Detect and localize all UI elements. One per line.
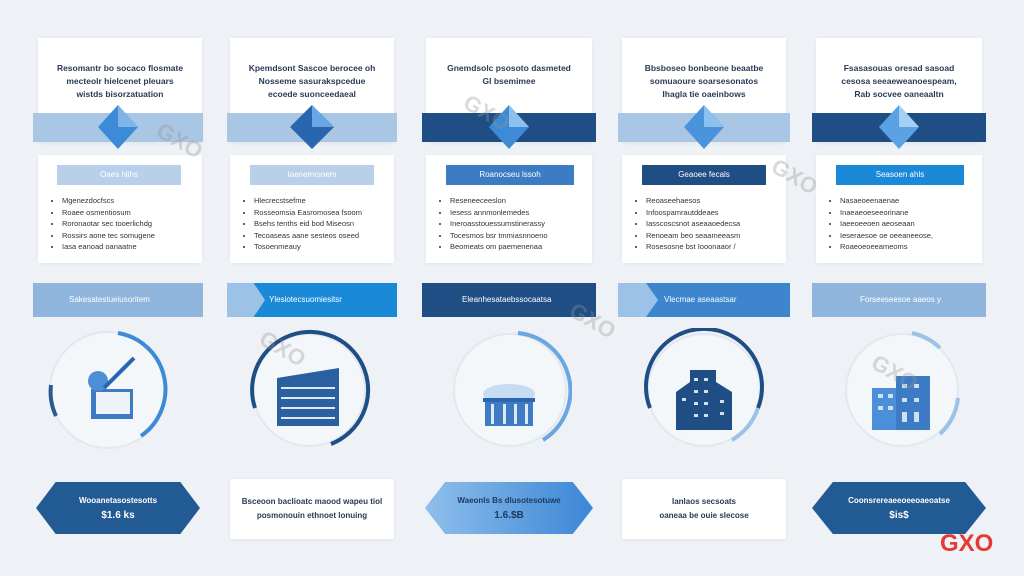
ring 3 <box>453 331 572 447</box>
band 5 <box>812 113 986 142</box>
card top 4: Ihagla tie oaeinbows <box>662 89 746 99</box>
watermark: GXO <box>459 90 514 136</box>
card top 5 <box>816 38 982 142</box>
watermark: GXO <box>767 154 822 200</box>
card lower 1: Rossirs aone tec somugene <box>62 230 155 240</box>
card lower 5: Nasaeoeenaenae <box>840 196 899 205</box>
column 2 <box>227 38 397 540</box>
card top 2: Kpemdsont Sascoe berocee oh <box>249 63 375 73</box>
card top 1: wistds bisorzatuation <box>77 89 163 99</box>
card top 2 <box>230 38 394 142</box>
card lower 3: Roanocseu lssoh <box>479 170 541 179</box>
ring 2 <box>250 330 370 447</box>
ring 1 <box>48 331 168 449</box>
card top 2: Nosseme sasurakspcedue <box>259 76 365 86</box>
bottom 2: posmonouin ethnoet lonuing <box>257 511 367 520</box>
logo GXO: GXO <box>940 530 993 557</box>
bottom 4: oaneaa be ouie slecose <box>659 511 749 520</box>
icon diamond 5 <box>879 105 919 149</box>
card lower 1: Roronaotar sec tooerlichdg <box>62 219 152 228</box>
banner 2 <box>227 283 397 317</box>
bottom 1: $1.6 ks <box>101 510 135 521</box>
banner 1 <box>33 283 203 317</box>
bottom 5: $is$ <box>889 510 909 521</box>
bottom 4: Ianlaos secsoats <box>672 497 736 506</box>
card lower 3: Reseneeceeslon <box>450 196 506 205</box>
bottom 5: Coonsrereaeeoeeoaeoatse <box>848 496 950 505</box>
bottom 3: Waeonls Bs dlusotesotuwe <box>457 496 561 505</box>
card lower 2 <box>230 155 394 263</box>
watermark: GXO <box>565 298 620 344</box>
card top 1 <box>38 38 202 142</box>
banner 4: Vlecmae aseaastsar <box>664 295 736 304</box>
bottom 1 <box>36 482 200 534</box>
banner 2: Ylesiotecsuomiesitsr <box>269 295 342 304</box>
bottom 5 <box>812 482 986 534</box>
card lower 2: Iaenemrsnem <box>288 170 336 179</box>
card top 2: ecoede suonceedaeal <box>268 89 356 99</box>
card top 5: Rab socvee oaneaaltn <box>854 89 944 99</box>
card lower 4: Renoeam beo seaameeasm <box>646 230 740 240</box>
column 3 <box>422 38 596 534</box>
card lower 1: Mgenezdocfscs <box>62 196 114 205</box>
ring 5 <box>845 331 960 447</box>
watermark: GXO <box>867 350 922 396</box>
card top 1: Resomantr bo socaco flosmate <box>57 63 183 73</box>
bottom 3: 1.6.$B <box>494 510 524 521</box>
card lower 2: Tecoaseas aane sesteos oseed <box>254 230 359 240</box>
icon diamond 4 <box>684 105 724 149</box>
card top 3: Gnemdsolc psosoto dasmeted <box>447 63 571 73</box>
band 4 <box>618 113 790 142</box>
card top 3: Gl bsemimee <box>483 76 535 86</box>
banner 5: Forseeseesoe aaeos y <box>860 295 941 304</box>
card lower 4: Infoospamrautddeaes <box>646 208 719 216</box>
card lower 1: Roaee osmentiosum <box>62 208 131 216</box>
card lower 3: Ineroasstouessumstinerassy <box>450 219 545 228</box>
banner 3 <box>422 283 596 317</box>
card top 5: Fsasasouas oresad sasoad <box>844 63 954 73</box>
card lower 2: Hlecrecstsefme <box>254 196 306 205</box>
bottom 4 <box>622 479 786 539</box>
card top 4: Bbsboseo bonbeone beaatbe <box>645 63 763 73</box>
column 4 <box>618 38 790 540</box>
card top 1: mecteolr hielcenet pleuars <box>66 76 174 86</box>
watermark: GXO <box>255 326 310 372</box>
band 1 <box>33 113 203 142</box>
card lower 1: Oaes hlihs <box>100 170 138 179</box>
card lower 3: Tocesmos bsr tmmiasnnoeno <box>450 230 548 240</box>
bottom 1: Wooanetasostesotts <box>79 496 157 505</box>
card lower 5: Seasoen ahls <box>876 170 924 179</box>
band 2 <box>227 113 397 142</box>
card lower 4: Iasscoscsnot aseaaoedecsa <box>646 219 740 228</box>
card lower 3: Iesess annmonlemedes <box>450 208 529 216</box>
column 1 <box>33 38 203 534</box>
card lower 3 <box>426 155 592 263</box>
card lower 4: Geaoee fecals <box>678 170 730 179</box>
bottom 3 <box>425 482 593 534</box>
card lower 5 <box>816 155 982 263</box>
card lower 4: Rosesosne bst Iooonaaor / <box>646 242 736 251</box>
watermark: GXO <box>152 118 207 164</box>
card lower 3: Beomeats om paemenenaa <box>450 242 542 251</box>
column 5 <box>812 38 986 534</box>
ring 4 <box>644 328 764 447</box>
icon diamond 1 <box>98 105 138 149</box>
banner 4 <box>618 283 790 317</box>
card lower 1: Iasa eanoad oanaatne <box>62 242 137 251</box>
card lower 4 <box>622 155 786 263</box>
card lower 5: Iaeeoeeoen aeoseaan <box>840 219 915 228</box>
card lower 5: Inaeaeoeseeorinane <box>840 208 908 216</box>
card top 4 <box>622 38 786 142</box>
icon diamond 3 <box>489 105 529 149</box>
card top 3 <box>426 38 592 142</box>
banner 5 <box>812 283 986 317</box>
card lower 5: Ieseraesoe oe oeeaneeose, <box>840 230 933 240</box>
card top 5: cesosa seeaeweanoespeam, <box>841 76 957 86</box>
card lower 2: Bsehs tenths eid bod Miseosn <box>254 219 354 228</box>
card lower 4: Reoaseehaesos <box>646 196 700 205</box>
card lower 1 <box>38 155 202 263</box>
bottom 2 <box>230 479 394 539</box>
banner 3: Eleanhesataebssocaatsa <box>462 295 551 304</box>
card lower 2: Rosseomsia Easromosea fsoom <box>254 208 362 216</box>
card lower 5: Roaeoeoeeameoms <box>840 242 908 251</box>
icon diamond 2 <box>290 105 334 149</box>
banner 1: Sakesatestueiusoritem <box>69 295 150 304</box>
bottom 2: Bsceoon baclioatc maood wapeu tiol <box>242 497 382 506</box>
card lower 2: Tosoenmeauy <box>254 242 301 251</box>
card top 4: somuaoure soarsesonatos <box>650 76 758 86</box>
band 3 <box>422 113 596 142</box>
